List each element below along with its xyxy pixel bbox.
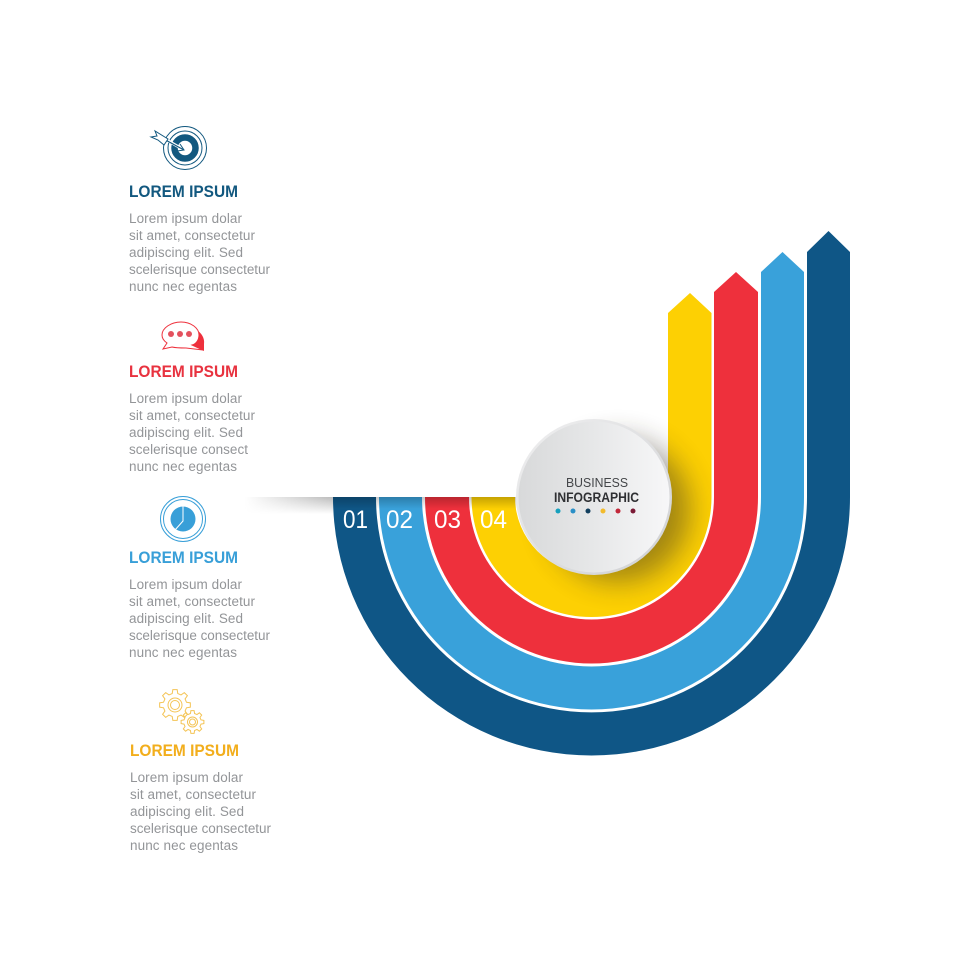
text block 3 bbox=[129, 577, 270, 660]
arrow 02 blue bbox=[379, 252, 804, 709]
panel: item 1 target bbox=[129, 126, 270, 294]
icon: speech bubbles bbox=[162, 322, 204, 351]
panel: item 2 chat bbox=[129, 322, 256, 474]
icon: gears bbox=[160, 690, 204, 733]
text block 1: sit amet, consectetur bbox=[129, 228, 256, 243]
number 04: 04 bbox=[480, 506, 507, 534]
text block 3: scelerisque consectetur bbox=[129, 628, 270, 643]
number 02: 02 bbox=[386, 506, 413, 534]
badge rim bbox=[516, 419, 672, 575]
text block 2: scelerisque consect bbox=[129, 442, 248, 457]
badge dots bbox=[556, 508, 636, 514]
shadow at top edge of the bands bbox=[333, 497, 518, 509]
text block 2: adipiscing elit. Sed bbox=[129, 425, 243, 440]
text block 4: Lorem ipsum dolar bbox=[130, 770, 244, 785]
text block 1: scelerisque consectetur bbox=[129, 262, 270, 277]
number 01: 01 bbox=[343, 506, 368, 534]
heading 3: LOREM IPSUM bbox=[129, 548, 238, 567]
text block 3: sit amet, consectetur bbox=[129, 594, 256, 609]
heading 2: LOREM IPSUM bbox=[129, 362, 238, 381]
text block 2: sit amet, consectetur bbox=[129, 408, 256, 423]
icon: clock bbox=[160, 496, 206, 542]
arrow 03 red bbox=[425, 272, 758, 664]
badge face bbox=[518, 422, 670, 572]
text block 1: Lorem ipsum dolar bbox=[129, 211, 242, 226]
badge subtitle: INFOGRAPHIC bbox=[554, 490, 639, 505]
badge title: BUSINESS bbox=[566, 475, 628, 490]
text block 4: sit amet, consectetur bbox=[130, 787, 256, 802]
badge shadow bbox=[546, 438, 690, 582]
text block 4 bbox=[130, 770, 272, 853]
arrow 04 yellow bbox=[472, 293, 712, 617]
panel: item 3 clock bbox=[129, 496, 270, 660]
text block 2: nunc nec egentas bbox=[129, 459, 237, 474]
icon: target with arrow bbox=[151, 126, 206, 170]
text block 3: Lorem ipsum dolar bbox=[129, 577, 242, 592]
text block 1 bbox=[129, 211, 270, 294]
text block 4: nunc nec egentas bbox=[130, 838, 238, 853]
number 03: 03 bbox=[434, 506, 461, 534]
centre badge bbox=[516, 419, 690, 582]
text block 3: nunc nec egentas bbox=[129, 645, 237, 660]
text block 2: Lorem ipsum dolar bbox=[129, 391, 242, 406]
arrow 01 navy bbox=[333, 231, 850, 756]
text block 1: adipiscing elit. Sed bbox=[129, 245, 243, 260]
heading 1: LOREM IPSUM bbox=[129, 182, 238, 201]
paper fold shadow bbox=[245, 497, 333, 514]
text block 4: scelerisque consectetur bbox=[130, 821, 272, 836]
text block 4: adipiscing elit. Sed bbox=[130, 804, 244, 819]
text block 1: nunc nec egentas bbox=[129, 279, 237, 294]
panel: item 4 gears bbox=[130, 690, 272, 853]
text block 3: adipiscing elit. Sed bbox=[129, 611, 243, 626]
heading 4: LOREM IPSUM bbox=[130, 741, 239, 760]
chart: curved arrows bbox=[245, 231, 850, 756]
text block 2 bbox=[129, 391, 256, 474]
